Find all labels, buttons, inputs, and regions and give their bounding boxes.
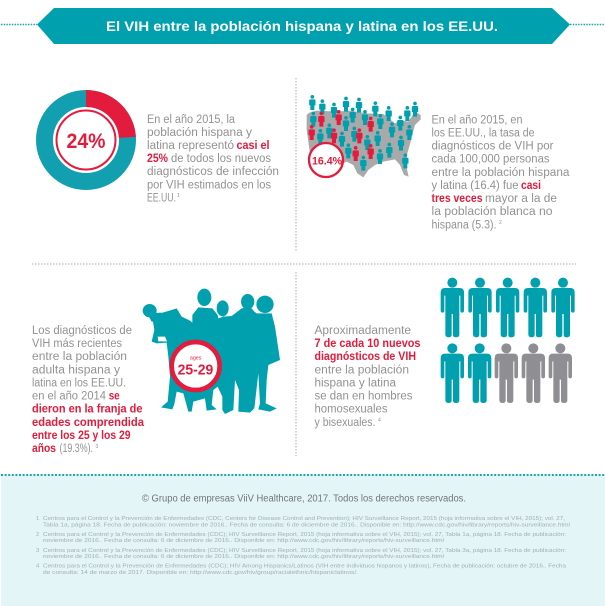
text block: diagnosis rate: los EE.UU., la tasa de <box>432 127 534 139</box>
text block: diagnosis rate: y latina (16.4) fue <box>432 180 518 192</box>
text block: diagnosis rate: cada 100,000 personas <box>432 154 550 166</box>
text block: diagnosis rate <box>432 114 570 231</box>
text block: 7 of 10: y bisexuales. <box>314 417 376 429</box>
text block: 7 of 10: entre la población <box>314 364 409 376</box>
text block: ages 25-29: 3 <box>96 444 98 450</box>
text block: 25% of diagnoses: casi el <box>236 140 270 152</box>
text block: diagnosis rate: diagnósticos de VIH por <box>432 140 554 152</box>
text block: diagnosis rate: 2 <box>499 220 502 226</box>
text block: diagnosis rate: mayor a la de <box>485 193 557 205</box>
references: 2 <box>36 532 39 538</box>
pictogram: 7 of 10 people <box>441 278 575 403</box>
text block: 7 of 10: homosexuales <box>314 404 388 416</box>
text block: diagnosis rate: tres veces <box>432 193 482 205</box>
text block: diagnosis rate: En el año 2015, en <box>432 114 522 126</box>
text block: 7 of 10: se dan en hombres <box>314 391 413 403</box>
text block: ages 25-29: entre los 25 y los 29 <box>32 430 130 442</box>
text block: ages 25-29: se <box>109 391 120 403</box>
text block: 25% of diagnoses: EE.UU. <box>147 192 176 204</box>
text block: ages 25-29: Los diagnósticos de <box>32 325 132 337</box>
title banner <box>1 8 604 44</box>
references: 3 <box>36 548 39 554</box>
references: noviembre de 2016.. Fecha de consulta: 6 de diciembre de 2016.. Disponible en: http://www.cdc.gov/hiv/library/reports/hiv-surveillance.html <box>43 538 444 544</box>
text block: 25% of diagnoses: por VIH estimados en los <box>147 180 271 192</box>
text block: diagnosis rate: casi <box>521 180 541 192</box>
text block: ages 25-29: adulta hispana y <box>32 364 120 376</box>
text block: 7 of 10: 7 de cada 10 nuevos <box>314 338 420 350</box>
text block: 25% of diagnoses: 1 <box>177 193 180 199</box>
text block: 25% of diagnoses: 25% <box>147 153 168 165</box>
text block: ages 25-29: dieron en la franja de <box>32 404 142 416</box>
references: Centros para el Control y la Prevención de Enfermedades (CDC); HIV Surveillance Report, 2015 (hoja informativa sobre el VIH, 2015); vol. 27, Tabla 3a, página 18. Fecha de publicación: <box>43 548 566 554</box>
text block: ages 25-29 <box>32 325 145 455</box>
text block: 7 of 10: diagnósticos de VIH <box>314 351 416 363</box>
text block: ages 25-29: (19.3%). <box>60 443 93 455</box>
US map with people <box>307 95 421 177</box>
text block: 25% of diagnoses: diagnósticos de infección <box>147 166 279 178</box>
text block: 25% of diagnoses: En el año 2015, la <box>147 114 236 126</box>
copyright: © Grupo de empresas ViiV Healthcare, 2017. Todos los derechos reservados. <box>142 494 466 504</box>
references: de consulta: 14 de marzo de 2017. Disponible en: http://www.cdc.gov/hiv/group/racialethnic/hispaniclatinos/. <box>43 570 358 576</box>
US map with people: 16.4% <box>312 155 342 167</box>
silhouette group with age badge: ages <box>190 356 202 362</box>
text block: 7 of 10: Aproximadamente <box>314 325 411 337</box>
text block: ages 25-29: entre la población <box>32 351 127 363</box>
references <box>36 516 570 576</box>
references: Centros para el Control y la Prevención de Enfermedades (CDC); HIV Surveillance Report, 2015 (hoja informativa sobre el VIH, 2015); vol. 27, Tabla 1a, página 18. Fecha de publicación: <box>43 532 566 538</box>
donut chart: 24% <box>44 98 128 182</box>
silhouette group with age badge: 25-29 <box>178 362 213 378</box>
text block: ages 25-29: latina en los EE.UU. <box>32 378 126 390</box>
footer panel <box>1 475 605 606</box>
references: Centros para el Control y la Prevención de Enfermedades (CDC); HIV Among Hispanics/Latinos (VIH entre individuos hispanos y latinos), Fecha de publicación: octubre de 2016.. Fecha <box>43 564 567 570</box>
title banner: El VIH entre la población hispana y latina en los EE.UU. <box>106 18 498 34</box>
text block: diagnosis rate: hispana (5.3). <box>432 219 496 231</box>
text block: diagnosis rate: la población blanca no <box>432 206 552 218</box>
donut chart: 24%: 24% <box>66 130 106 153</box>
text block: 25% of diagnoses: población hispana y <box>147 127 252 139</box>
text block: 25% of diagnoses: latina representó <box>147 140 234 152</box>
text block: 7 of 10: hispana y latina <box>314 378 397 390</box>
text block: ages 25-29: edades comprendida <box>32 417 145 429</box>
text block: ages 25-29: VIH más recientes <box>32 338 122 350</box>
references: noviembre de 2016.. Fecha de consulta: 6 de diciembre de 2016.. Disponible en: http://www.cdc.gov/hiv/library/reports/hiv-surveillance.html <box>43 554 444 560</box>
references: Tabla 1a, página 18. Fecha de publicación: noviembre de 2016.. Fecha de consulta: 6 de diciembre de 2016.. Disponible en: http://www.cdc.gov/hiv/library/reports/hiv-surveillance.html <box>43 522 570 528</box>
silhouette group with age badge <box>143 289 280 414</box>
text block: ages 25-29: en el año 2014 <box>32 391 107 403</box>
text block: 25% of diagnoses: de todos los nuevos <box>171 153 271 165</box>
text block: diagnosis rate: entre la población hispana <box>432 167 570 179</box>
references: 1 <box>36 516 39 522</box>
references: 4 <box>36 564 40 570</box>
text block: ages 25-29: años <box>32 443 56 455</box>
references: Centros para el Control y la Prevención de Enfermedades (CDC, Centers for Disease Control and Prevention); HIV Surveillance Report, 2015 (hoja informativa sobre el VIH, 2015); vol. 27, <box>43 516 565 522</box>
text block: 7 of 10 <box>314 325 420 429</box>
text block: 25% of diagnoses <box>147 114 279 204</box>
text block: 7 of 10: 4 <box>378 418 381 424</box>
